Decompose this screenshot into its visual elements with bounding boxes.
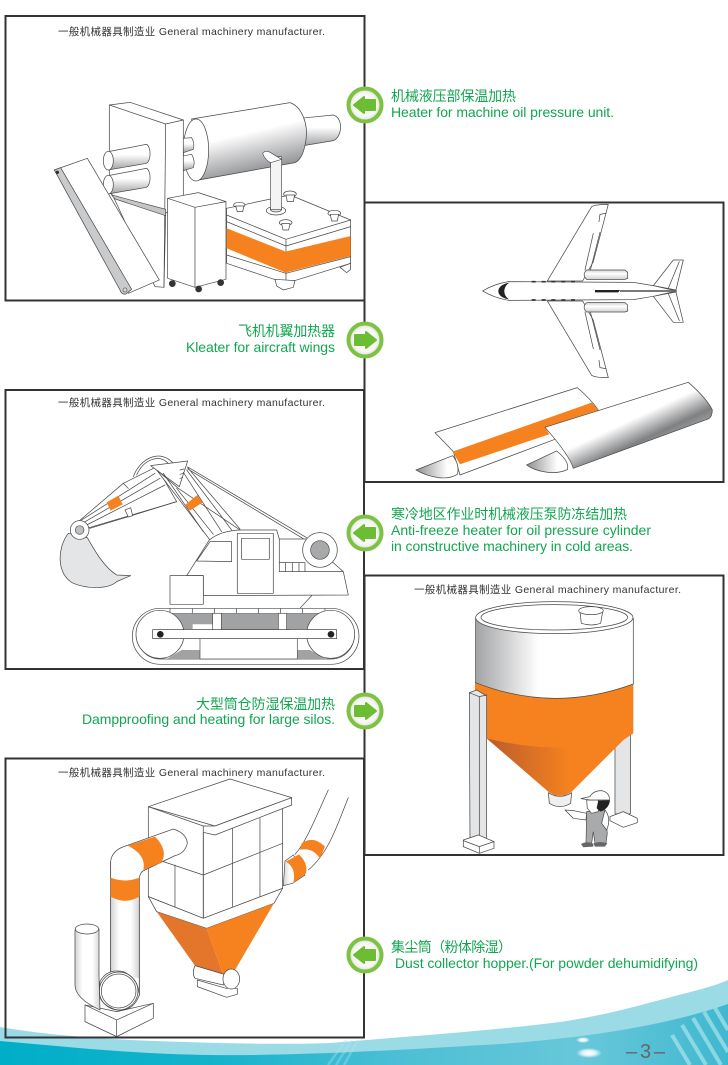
panel: excavator antifreeze xyxy=(6,390,364,669)
label: hydraulic unit heater: Heater for machine oil pressure unit. xyxy=(391,104,614,120)
illustration: airplane top view xyxy=(483,204,683,378)
label: silo heater xyxy=(82,696,335,727)
panel: dust collector xyxy=(6,758,364,1038)
label: antifreeze heater: 寒冷地区作业时机械液压泵防冻结加热 xyxy=(391,506,627,522)
icon: arrow button hydraulic unit xyxy=(348,88,382,122)
illustration: silo and worker xyxy=(463,602,637,853)
panel: aircraft wing heater xyxy=(364,202,724,482)
background wave xyxy=(0,980,728,1065)
panel caption: 一般机械器具制造业 General machinery manufacturer. xyxy=(58,396,325,409)
illustration: dust collector hopper xyxy=(75,779,348,1037)
panel caption: 一般机械器具制造业 General machinery manufacturer. xyxy=(58,766,325,779)
icon: arrow button excavator xyxy=(348,516,382,550)
icon: arrow button aircraft xyxy=(348,324,382,356)
panel: large silo xyxy=(364,576,724,855)
label: antifreeze heater: in constructive machinery in cold areas. xyxy=(391,538,633,554)
page number: –3– xyxy=(626,1041,666,1063)
illustration: excavator xyxy=(60,456,359,664)
label: hydraulic unit heater: 机械液压部保温加热 xyxy=(391,88,516,104)
label: antifreeze heater: Anti-freeze heater for oil pressure cylinder xyxy=(391,522,651,538)
label: dust collector: 集尘筒（粉体除湿） xyxy=(391,939,512,955)
illustration: hydraulic machine xyxy=(54,102,351,294)
panel caption: 一般机械器具制造业 General machinery manufacturer. xyxy=(414,583,681,596)
label: silo heater: Dampproofing and heating for large silos. xyxy=(82,711,335,727)
panel: general machinery hydraulic unit xyxy=(6,16,364,300)
label: dust collector xyxy=(391,939,698,971)
illustration: wing heater sections xyxy=(416,382,712,478)
icon: arrow button dust collector xyxy=(348,938,382,972)
label: aircraft wing heater xyxy=(186,323,335,355)
icon: arrow button silo xyxy=(348,694,382,728)
label: aircraft wing heater: 飞机机翼加热器 xyxy=(238,323,335,339)
label: silo heater: 大型筒仓防湿保温加热 xyxy=(196,696,335,712)
label: hydraulic unit heater xyxy=(391,88,614,120)
label: antifreeze heater xyxy=(391,506,651,554)
panel caption: 一般机械器具制造业 General machinery manufacturer. xyxy=(58,25,325,38)
label: aircraft wing heater: Kleater for aircraft wings xyxy=(186,339,335,355)
label: dust collector: Dust collector hopper.(For powder dehumidifying) xyxy=(395,955,698,971)
